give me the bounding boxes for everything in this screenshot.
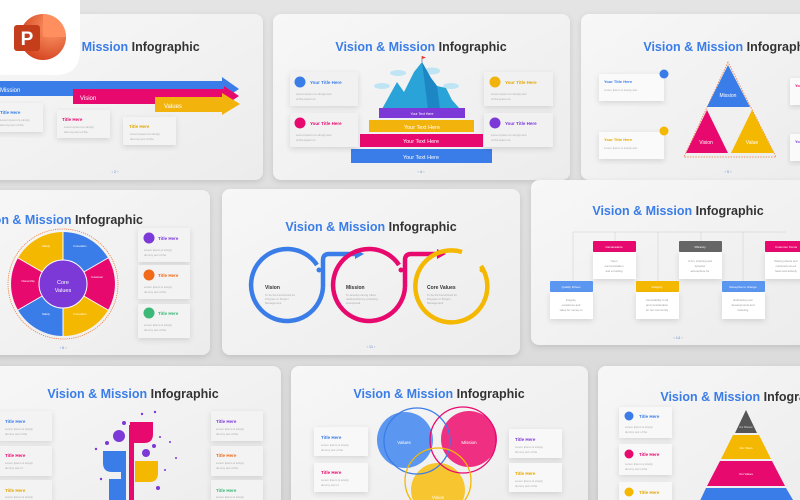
circle: vision <box>251 249 364 321</box>
card 1 <box>0 103 43 132</box>
slide: triangle: ‹ 5 › <box>724 169 732 174</box>
chart: A fun, inspiring and <box>688 259 712 263</box>
cards: Lorem Ipsum is simply <box>144 248 172 252</box>
cards: Lorem Ipsum is simply <box>321 443 349 447</box>
chart: Camaraderie <box>605 245 623 249</box>
cards <box>290 72 553 147</box>
pyramid <box>698 410 796 500</box>
slide: tree <box>0 366 281 500</box>
cards: dummy text of the <box>625 430 648 434</box>
cards: dummy text of the <box>144 290 167 294</box>
cards: dummy text of the <box>216 432 239 436</box>
cards: Lorem Ipsum is simply <box>144 323 172 327</box>
cards: Lorem Ipsum is simply text <box>296 92 332 96</box>
circle: vision: To be the benchmark for <box>265 293 295 297</box>
cards: dummy text of the <box>625 467 648 471</box>
circle: mission: exceptional <box>346 301 361 305</box>
cards: Lorem Ipsum is simply <box>216 461 244 465</box>
cards: of the Ipsum is <box>491 138 511 142</box>
cards <box>0 411 263 500</box>
stairs: Your Text Here <box>404 125 440 131</box>
title: Vision & Mission Infographic <box>285 220 457 234</box>
wheel: Safety <box>42 244 51 248</box>
venn diagram: Mission <box>461 440 477 445</box>
card 2: Lorem Ipsum is simply <box>64 125 94 129</box>
cards: Lorem Ipsum is simply <box>216 427 244 431</box>
title: Vision & Mission Infographic <box>353 387 525 401</box>
venn diagram <box>377 407 497 500</box>
card 2 <box>57 110 110 138</box>
cards: Lorem Ipsum is simply <box>5 495 33 499</box>
triangle diagram: Value <box>746 140 758 146</box>
cards: Title Here <box>639 414 660 419</box>
venn diagram: Values <box>397 440 411 445</box>
wheel: Ownership <box>21 279 35 283</box>
chart: for our community <box>646 308 669 312</box>
cards: Your Title Here <box>604 79 633 84</box>
slide: core values wheel <box>0 190 210 355</box>
chart: communication <box>605 264 624 268</box>
cards: Title Here <box>158 273 179 278</box>
cards: Title Here <box>216 453 237 458</box>
chart: Embracing new <box>733 298 754 302</box>
card 2: dummy text of the <box>64 130 88 134</box>
cards <box>138 228 190 338</box>
cards: Lorem Ipsum is simply <box>321 478 349 482</box>
cards: Title Here <box>5 419 26 424</box>
title: Vision & Mission Infographic <box>335 40 507 54</box>
cards: Lorem Ipsum is simply <box>625 425 653 429</box>
cards: Yo <box>795 139 800 144</box>
circle: core values <box>415 250 487 322</box>
circle: core values: Program or Project <box>427 297 451 301</box>
circle: mission <box>333 249 446 321</box>
cards: dummy text of the <box>144 328 167 332</box>
cards: Lorem Ipsum is simply text <box>604 146 637 150</box>
arrow: vision: Vision <box>80 96 96 102</box>
card 2: Title Here <box>62 117 83 122</box>
card 1: Lorem Ipsum is simply <box>0 118 30 122</box>
chart <box>550 232 800 319</box>
card 3 <box>123 117 176 145</box>
slide: venn <box>291 366 588 500</box>
logo: PowerPoint badge <box>0 0 80 75</box>
cards: Lorem Ipsum is simply <box>515 479 543 483</box>
card 3: Title Here <box>129 124 150 129</box>
arrow: values: Values <box>164 104 182 110</box>
cards: dummy text of <box>321 483 339 487</box>
cards: dummy text of the <box>515 450 538 454</box>
arrow: values <box>155 93 240 115</box>
chart: and consideration <box>646 303 668 307</box>
cards: Yo <box>795 83 800 88</box>
circle: vision: Management <box>265 301 282 305</box>
circle: core values: Management <box>427 301 444 305</box>
wheel: Innovation <box>74 244 87 248</box>
slide: org chart: ‹ 14 › <box>673 335 683 340</box>
card 1: dummy text of the <box>0 123 24 127</box>
cards: dummy text of the <box>5 432 28 436</box>
stairs: Your Text Here <box>411 112 434 116</box>
chart: developments and <box>732 303 755 307</box>
slide: triangle <box>581 14 800 180</box>
circle: vision: Vision <box>265 285 280 291</box>
slide: circles flow <box>222 189 520 355</box>
wheel: Customer <box>91 275 103 279</box>
card 3: dummy text of the <box>130 137 154 141</box>
cards: Title Here <box>158 311 179 316</box>
stairs: Your Text Here <box>403 139 439 145</box>
cards: Your Title Here <box>310 121 342 126</box>
card 1: Title Here <box>0 110 21 115</box>
cards: of the Ipsum is <box>296 97 316 101</box>
cards: Title Here <box>5 453 26 458</box>
slide: circles flow: ‹ 11 › <box>366 344 376 349</box>
arrow: vision <box>73 86 239 106</box>
cards: Lorem Ipsum is simply text <box>604 88 637 92</box>
cards: Title Here <box>158 236 179 241</box>
cards <box>619 407 672 500</box>
cards: Your Title Here <box>505 121 537 126</box>
triangle diagram <box>684 62 776 157</box>
cards: Title Here <box>216 419 237 424</box>
chart: value for money in <box>560 308 583 312</box>
cards: dummy text of the <box>216 466 239 470</box>
wheel: Values <box>55 288 71 294</box>
chart: Customer Focus <box>775 245 797 249</box>
cards: Lorem Ipsum is simply text <box>296 133 332 137</box>
title: Vision & Mission Infographic <box>592 204 764 218</box>
title: Vision & Mission Infographic <box>47 387 219 401</box>
arrow: mission: Mission <box>0 88 20 94</box>
cards: Title Here <box>321 435 342 440</box>
mountains <box>374 56 460 109</box>
wheel <box>8 229 118 339</box>
chart: dynamic <box>695 264 706 268</box>
chart: atmosphere for <box>691 269 709 273</box>
cards: Title Here <box>515 437 536 442</box>
chart: Integrity <box>652 285 663 289</box>
chart: Vibrancy <box>694 245 706 249</box>
chart: excellence and <box>562 303 581 307</box>
slide: org chart <box>531 180 800 345</box>
card 3: Lorem Ipsum is simply <box>130 132 160 136</box>
wheel: Innovation <box>74 312 87 316</box>
cards: Lorem Ipsum is simply text <box>491 133 527 137</box>
pyramid: Our Values <box>739 472 753 476</box>
cards: Title Here <box>321 470 342 475</box>
venn diagram: Vision <box>432 495 445 500</box>
cards: Title Here <box>515 471 536 476</box>
cards: dummy text of <box>5 466 23 470</box>
circle: vision: Program or Project <box>265 297 289 301</box>
chart: Quality Driven <box>562 285 581 289</box>
chart: customers at our <box>776 264 796 268</box>
pyramid: Our Vision <box>739 446 753 450</box>
cards: Title Here <box>639 490 660 495</box>
stairs <box>351 108 492 163</box>
cards: Lorem Ipsum is simply <box>216 495 244 499</box>
logo: PowerPoint badge: P <box>21 29 34 50</box>
pyramid: Our Mission <box>739 425 753 429</box>
cards: dummy text of the <box>515 484 538 488</box>
cards: Title Here <box>639 452 660 457</box>
cards <box>599 70 800 161</box>
slide: core values wheel: ‹ 6 › <box>59 345 67 350</box>
cards: Title Here <box>216 488 237 493</box>
chart: Integrity, <box>566 298 576 302</box>
cards: Your Title Here <box>604 137 633 142</box>
arrow: mission <box>0 77 239 100</box>
circle: core values: Core Values <box>427 285 456 291</box>
stairs: Your Text Here <box>403 155 439 161</box>
chart: Accessibility to all <box>646 298 668 302</box>
chart: Placing clients and <box>774 259 798 263</box>
circle: mission: relationships by providing <box>346 297 378 301</box>
circle: core values: To be the benchmark for <box>427 293 457 297</box>
cards: Title Here <box>5 488 26 493</box>
slide: arrows <box>0 14 263 180</box>
cards: of the Ipsum is <box>296 138 316 142</box>
cards: of the Ipsum is <box>491 97 511 101</box>
chart: and a trusting <box>606 269 623 273</box>
page number: ‹ 2 › <box>111 169 119 174</box>
cards <box>314 427 562 492</box>
cards: Lorem Ipsum is simply <box>144 285 172 289</box>
cards: Your Title Here <box>505 80 537 85</box>
cards: dummy text of the <box>144 253 167 257</box>
chart: fostering <box>738 308 749 312</box>
slide: pyramid <box>598 366 800 500</box>
circle: mission: To develop strong Client <box>346 293 376 297</box>
cards: Lorem Ipsum is simply <box>5 461 33 465</box>
cards: Lorem Ipsum is simply text <box>491 92 527 96</box>
circle: mission: Mission <box>346 285 365 291</box>
slide: mountain stairs: ‹ 4 › <box>417 169 425 174</box>
cards: Your Title Here <box>310 80 342 85</box>
triangle diagram: Vision <box>699 140 713 146</box>
wheel: Safety <box>42 312 51 316</box>
cards: Lorem Ipsum is simply <box>625 462 653 466</box>
slide: mountain stairs <box>273 14 570 180</box>
wheel: Core <box>57 280 69 286</box>
title: Vision & Mission Infographic <box>28 40 200 54</box>
cards: dummy text of the <box>321 448 344 452</box>
chart: Open <box>611 259 618 263</box>
cards: Lorem Ipsum is simply <box>5 427 33 431</box>
triangle diagram: Mission <box>720 93 737 99</box>
tree <box>95 411 177 500</box>
chart: heart and actively <box>775 269 798 273</box>
chart: Receptive to change <box>729 285 757 289</box>
cards: Lorem Ipsum is simply <box>515 445 543 449</box>
